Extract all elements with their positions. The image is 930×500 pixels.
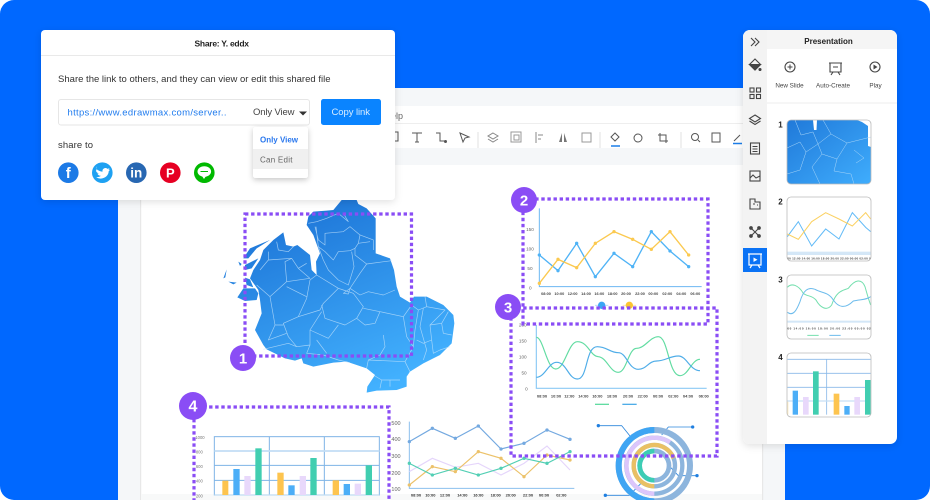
chart 2: line chart: 14:00 <box>581 292 591 296</box>
slide thumbnail 2: 00 12:00 14:00 16:00 18:00 20:00 22:00 00:00 02:00 0 <box>787 256 871 260</box>
dialog title: Share: Y. eddx <box>194 38 249 48</box>
icon: play <box>869 62 882 90</box>
chart 2: line chart: 50 <box>527 266 533 271</box>
slide numbers: 2 <box>778 198 783 206</box>
icon: auto-create: Auto-Create <box>816 82 850 90</box>
chart 3: smooth line chart: 02:00 <box>668 394 679 399</box>
icon: facebook <box>58 162 79 183</box>
badge 2 <box>511 187 537 213</box>
chart 3: smooth line chart: 20:00 <box>623 394 634 399</box>
panel: share dialog <box>41 30 395 200</box>
callout box 2 <box>523 199 708 324</box>
badge 4: 4 <box>189 398 198 416</box>
chart 4: bar chart: 600 <box>196 464 203 469</box>
chart 5: multi-line chart: 22:00 <box>523 492 534 497</box>
chart 2: line chart: 10:00 <box>554 292 564 296</box>
chart 2: line chart: 08:00 <box>541 292 551 296</box>
panel: presentation sidebar <box>743 30 897 444</box>
slide numbers: 4 <box>778 353 783 362</box>
y labels of multi-line chart: 200 <box>391 471 401 477</box>
sidebar icons <box>750 38 761 237</box>
copy link button <box>321 99 381 125</box>
dropdown menu: Only View <box>260 136 299 144</box>
icon: line <box>194 162 215 183</box>
slide numbers: 1 <box>778 120 783 130</box>
chart 5: multi-line chart: 14:00 <box>457 492 468 497</box>
chart 2: line chart: 0 <box>529 285 532 290</box>
chart 3: smooth line chart: 22:00 <box>638 394 649 399</box>
chart 2: line chart: 18:00 <box>608 292 618 296</box>
chart 2: line chart: 02:00 <box>662 292 672 296</box>
slide thumbnail 2 <box>787 197 871 261</box>
icon: pinterest <box>160 162 181 183</box>
chart 2: line chart: 16:00 <box>594 292 604 296</box>
link input: https://www.edrawmax.com/server.. <box>68 108 226 118</box>
icon: facebook: f <box>66 165 72 182</box>
chart 4: bar chart: 1000 <box>195 435 205 440</box>
chart 5: multi-line chart: 08:00 <box>411 492 422 497</box>
y labels of multi-line chart: 300 <box>391 454 401 460</box>
chart 5: multi-line chart: 12:00 <box>440 492 451 497</box>
chart 3: smooth line chart: 14:00 <box>578 394 589 399</box>
chart 4: bar chart: 400 <box>196 479 203 484</box>
icon: new slide: New Slide <box>775 82 804 90</box>
callout box 3 <box>511 308 717 456</box>
toolbar icons <box>392 132 742 148</box>
chart 5: multi-line chart <box>408 422 574 497</box>
link input <box>58 100 310 125</box>
chart 3: smooth line chart: 06:00 <box>699 394 710 399</box>
chart 3: smooth line chart: 50 <box>521 371 527 376</box>
radial ring chart <box>597 424 699 500</box>
y labels of multi-line chart <box>391 421 401 493</box>
chart 3: smooth line chart: 10:00 <box>551 394 562 399</box>
share to label: share to <box>58 140 93 151</box>
icon: auto-create <box>816 63 850 90</box>
chart 4: bar chart <box>195 435 379 498</box>
chart 3: smooth line chart: 18:00 <box>607 394 618 399</box>
chart 3: smooth line chart: 08:00 <box>537 394 548 399</box>
chart 3: smooth line chart <box>519 323 710 404</box>
icon: play: Play <box>869 82 882 90</box>
y labels of multi-line chart: 400 <box>391 437 401 443</box>
chart 2: line chart: 150 <box>526 227 534 232</box>
badge 1: 1 <box>239 350 247 368</box>
copy link button: Copy link <box>332 107 370 118</box>
chart 3: smooth line chart: 12:00 <box>564 394 575 399</box>
badge 3 <box>495 294 521 320</box>
active sidebar tab <box>743 248 767 272</box>
chart 5: multi-line chart: 02:00 <box>556 492 567 497</box>
chart 3: smooth line chart: 0 <box>525 387 528 392</box>
chart 3: smooth line chart: 04:00 <box>683 394 694 399</box>
icon: twitter <box>92 162 113 183</box>
callout box 4 <box>194 407 389 500</box>
slide thumbnail 4 <box>787 353 871 417</box>
chart 5: multi-line chart: 20:00 <box>506 492 517 497</box>
icon: pinterest: P <box>166 166 175 180</box>
chart 3: smooth line chart: 100 <box>519 355 527 360</box>
callout box 1 <box>245 214 412 356</box>
chart 2: line chart: 06:00 <box>690 292 700 296</box>
chart 5: multi-line chart: 16:00 <box>473 492 484 497</box>
badge 3: 3 <box>504 300 512 316</box>
link input: Only View <box>253 107 295 118</box>
panel title: Presentation <box>804 37 853 46</box>
dropdown menu <box>253 127 308 178</box>
slide thumbnail 3: 00 14:00 16:00 18:00 20:00 22:00 00:00 02 <box>787 327 871 331</box>
instruction text: Share the link to others, and they can view or edit this shared file <box>58 74 330 85</box>
chart 4: bar chart: 200 <box>196 493 203 498</box>
slide numbers: 3 <box>778 276 783 284</box>
chart 2: line chart: 100 <box>526 246 534 251</box>
chart 2: line chart: 04:00 <box>676 292 686 296</box>
icon: linkedin <box>126 162 147 183</box>
chart 2: line chart <box>526 208 702 309</box>
chart 2: line chart: 12:00 <box>568 292 578 296</box>
y labels of multi-line chart: 100 <box>391 487 401 493</box>
map <box>223 200 454 393</box>
chart 3: smooth line chart: 00:00 <box>653 394 664 399</box>
slide thumbnail 1 <box>787 120 871 184</box>
chart 2: line chart: 22:00 <box>635 292 645 296</box>
chart 5: multi-line chart: 10:00 <box>425 492 436 497</box>
y labels of multi-line chart: 500 <box>391 421 401 427</box>
badge 1 <box>230 345 256 371</box>
chart 2: line chart: 20:00 <box>621 292 631 296</box>
chart 3: smooth line chart: 200 <box>519 323 527 328</box>
chart 2: line chart: 00:00 <box>648 292 658 296</box>
badge 2: 2 <box>520 192 528 210</box>
badge 4 <box>179 392 207 420</box>
chart 4: bar chart: 800 <box>196 449 203 454</box>
menu text: Help <box>384 111 403 121</box>
slide thumbnail 3 <box>787 275 871 339</box>
chart 5: multi-line chart: 18:00 <box>491 492 502 497</box>
chart 3: smooth line chart: 150 <box>519 339 527 344</box>
chart 5: multi-line chart: 00:00 <box>539 492 550 497</box>
slide numbers <box>778 120 783 362</box>
icon: new slide <box>775 62 804 90</box>
chart 3: smooth line chart: 16:00 <box>592 394 603 399</box>
dropdown menu: Can Edit <box>260 156 293 164</box>
icon: linkedin: in <box>130 166 142 180</box>
editor window <box>118 88 785 500</box>
